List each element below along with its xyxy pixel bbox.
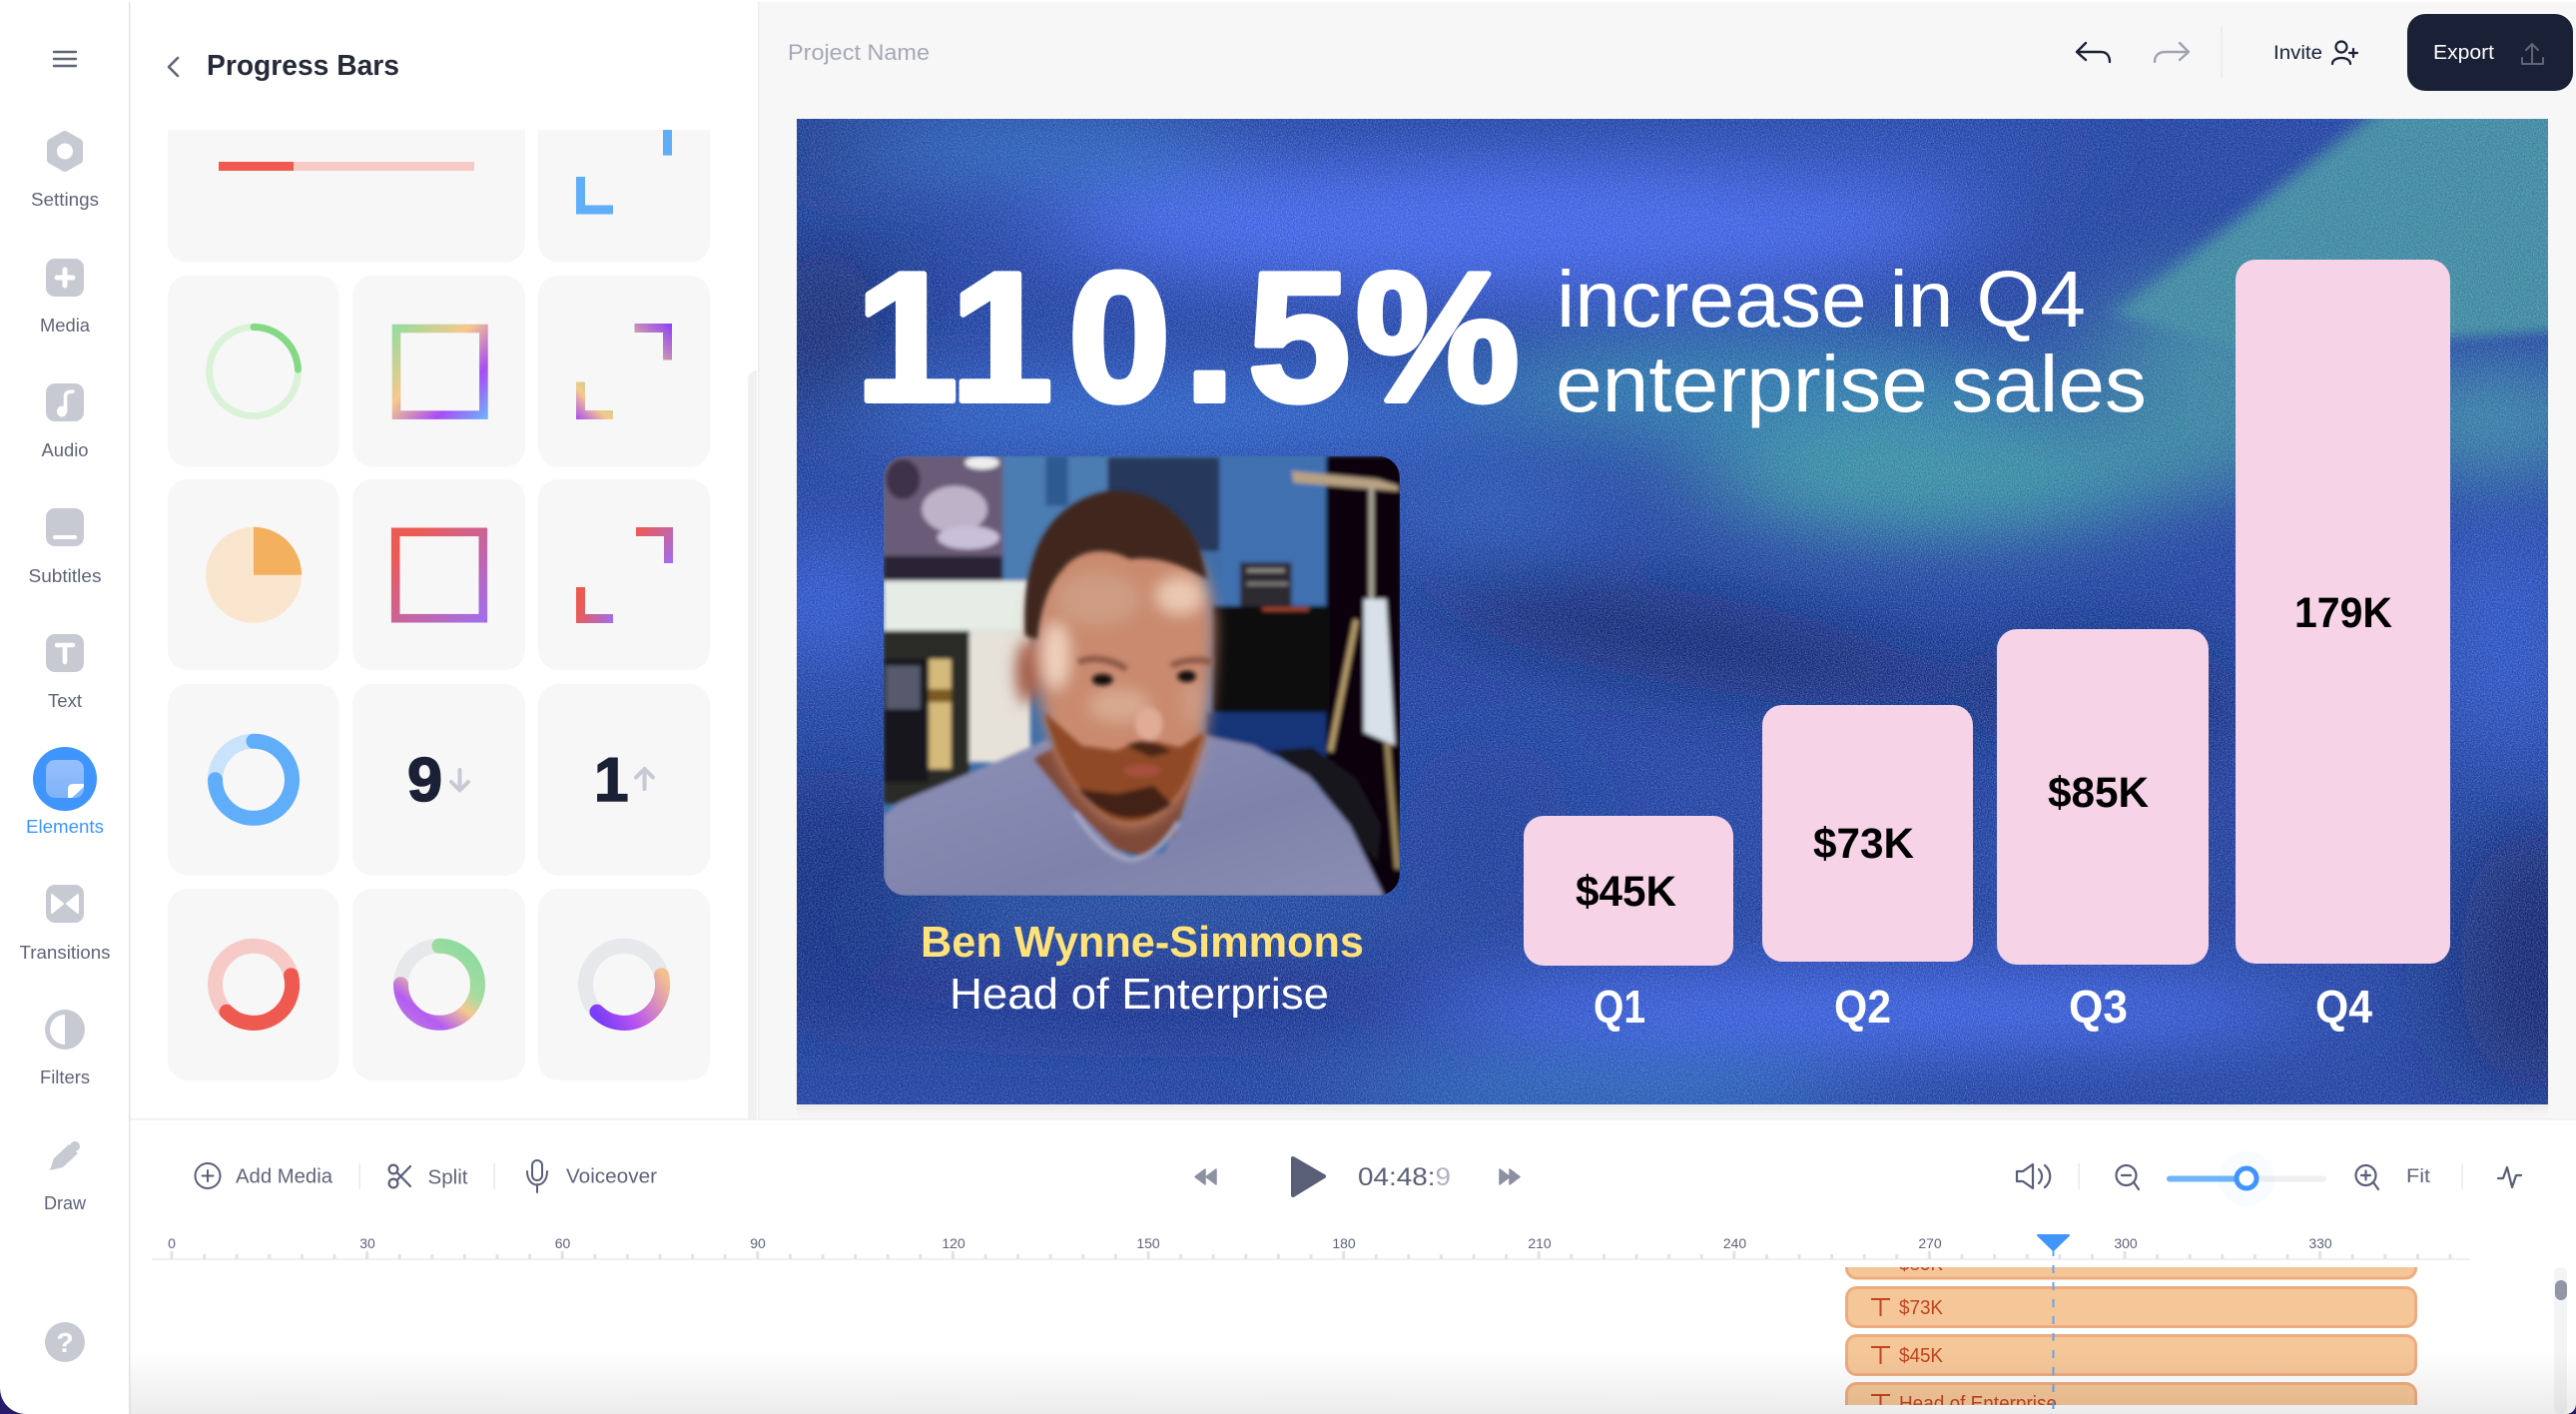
nav item: text: Text bbox=[48, 691, 82, 711]
bar Q3 bbox=[1997, 629, 2209, 1033]
timeline scrollbar bbox=[2554, 1267, 2567, 1414]
zoom slider bbox=[2167, 1150, 2326, 1206]
toolbar: add media bbox=[196, 1163, 333, 1188]
icon: activity bbox=[2498, 1167, 2521, 1187]
card: counter 9: 9 bbox=[407, 746, 442, 815]
bar Q1: $45K bbox=[1576, 868, 1676, 916]
nav item: settings: Settings bbox=[31, 190, 99, 210]
headline line 2: enterprise sales bbox=[1556, 340, 2147, 428]
track: head of enterprise bbox=[1847, 1384, 2416, 1414]
nav item: media: Media bbox=[40, 316, 91, 336]
card: blue donut bbox=[168, 684, 339, 876]
nav item: elements active: Elements bbox=[26, 817, 104, 837]
bar Q2: $73K bbox=[1813, 820, 1914, 868]
bar Q1 bbox=[1524, 816, 1733, 1033]
nav item: draw: Draw bbox=[44, 1193, 87, 1213]
icon: redo bbox=[2155, 43, 2189, 62]
presenter role: Head of Enterprise bbox=[950, 970, 1329, 1019]
icon: invite person bbox=[2332, 42, 2357, 64]
icon: zoom out bbox=[2117, 1165, 2139, 1189]
window bottom fade bbox=[130, 1350, 2576, 1414]
window corners bbox=[0, 1388, 2576, 1414]
presenter name: Ben Wynne-Simmons bbox=[921, 918, 1364, 967]
fit label: Fit bbox=[2406, 1166, 2431, 1187]
icon: upload bbox=[2522, 44, 2543, 64]
sidebar bbox=[0, 0, 130, 1414]
nav item: subtitles bbox=[28, 508, 102, 586]
ruler: 60 bbox=[555, 1235, 570, 1251]
nav item: text bbox=[46, 634, 84, 711]
bar Q3: Q3 bbox=[2069, 981, 2128, 1033]
card: counter 1: 1 bbox=[594, 746, 628, 815]
card: violet donut bbox=[538, 889, 710, 1080]
top bar bbox=[788, 14, 2573, 91]
ruler bbox=[152, 1235, 2470, 1260]
help button: ? bbox=[56, 1327, 74, 1358]
button: fast forward bbox=[1500, 1169, 1520, 1184]
card: red purple square bbox=[352, 479, 525, 670]
ruler: 240 bbox=[1723, 1235, 1746, 1251]
card grid bbox=[168, 60, 710, 1080]
timeline tracks bbox=[1847, 1238, 2416, 1414]
playhead bbox=[2038, 1235, 2069, 1414]
nav item: filters: Filters bbox=[40, 1067, 90, 1087]
bar Q1: Q1 bbox=[1594, 981, 1645, 1033]
bar Q2 bbox=[1762, 705, 1973, 1033]
track: $73K bbox=[1847, 1288, 2416, 1326]
icon: volume bbox=[2017, 1164, 2050, 1188]
bar chart bbox=[1524, 260, 2450, 1033]
panel scrollbar bbox=[748, 370, 757, 1118]
ruler: 0 bbox=[168, 1235, 176, 1251]
track: $73K: $73K bbox=[1899, 1297, 1944, 1319]
bar Q3: $85K bbox=[2048, 769, 2149, 817]
nav item: elements active bbox=[26, 747, 104, 837]
card: gradient donut bbox=[352, 889, 525, 1080]
track: $85K: $85K bbox=[1899, 1253, 1944, 1275]
head bbox=[1015, 522, 1214, 826]
icon: undo bbox=[2077, 43, 2110, 62]
ruler: 330 bbox=[2308, 1235, 2332, 1251]
ruler: 210 bbox=[1528, 1235, 1552, 1251]
headline line 1: increase in Q4 bbox=[1557, 255, 2086, 344]
photo of presenter bbox=[884, 456, 1402, 899]
toolbar: voiceover: Voiceover bbox=[566, 1166, 657, 1188]
ruler: 150 bbox=[1136, 1235, 1160, 1251]
bar Q4: 179K bbox=[2294, 589, 2392, 637]
toolbar: add media: Add Media bbox=[236, 1166, 333, 1188]
timeline panel bbox=[130, 1118, 2576, 1414]
nav item: subtitles: Subtitles bbox=[28, 566, 102, 586]
nav item: transitions bbox=[20, 885, 110, 963]
button: rewind bbox=[1195, 1169, 1216, 1184]
export button bbox=[2407, 14, 2573, 91]
help button bbox=[45, 1322, 85, 1362]
icon: menu bbox=[54, 52, 76, 66]
button: play bbox=[1293, 1158, 1324, 1195]
big stat 110.5%: 110.5% bbox=[856, 234, 1520, 439]
main canvas background bbox=[759, 2, 2576, 1118]
ruler: 270 bbox=[1918, 1235, 1942, 1251]
slide background gradient bbox=[797, 119, 2548, 1104]
track: $45K bbox=[1847, 1336, 2416, 1374]
nav item: media bbox=[40, 259, 91, 336]
nav item: audio bbox=[42, 383, 88, 460]
ruler: 90 bbox=[750, 1235, 766, 1251]
project name: Project Name bbox=[788, 40, 930, 65]
toolbar: voiceover bbox=[527, 1160, 657, 1192]
nav item: draw bbox=[44, 1141, 87, 1213]
bar Q4: Q4 bbox=[2315, 981, 2372, 1033]
timecode: 04:48: 9 bbox=[1358, 1163, 1451, 1191]
card: counter 9 bbox=[352, 684, 525, 876]
export button: Export bbox=[2433, 42, 2494, 64]
ruler: 120 bbox=[942, 1235, 966, 1251]
nav item: transitions: Transitions bbox=[20, 943, 110, 963]
bar Q4 bbox=[2236, 260, 2450, 1033]
icon: zoom in bbox=[2356, 1165, 2378, 1189]
icon: back chevron bbox=[169, 58, 178, 76]
ruler: 180 bbox=[1332, 1235, 1356, 1251]
slide shadow bbox=[797, 1104, 2548, 1118]
card: linear bar bbox=[168, 60, 525, 263]
card: gradient square bbox=[352, 276, 525, 466]
card: red purple corners bbox=[538, 479, 710, 670]
card: counter 1 bbox=[538, 684, 710, 876]
slide bbox=[797, 119, 2548, 1104]
panel heading: Progress Bars bbox=[207, 50, 399, 82]
toolbar: split: Split bbox=[427, 1166, 468, 1188]
ruler: 300 bbox=[2114, 1235, 2138, 1251]
card: red donut bbox=[168, 889, 339, 1080]
card: blue corners bbox=[538, 60, 710, 263]
nav item: audio: Audio bbox=[42, 440, 88, 460]
panel: progress bars bbox=[130, 0, 759, 1118]
track: $85K bbox=[1847, 1238, 2416, 1278]
nav item: settings bbox=[31, 135, 99, 210]
card: pie bbox=[168, 479, 339, 670]
invite label: Invite bbox=[2273, 43, 2322, 64]
bar Q2: Q2 bbox=[1834, 981, 1891, 1033]
card: gradient corners bbox=[538, 276, 710, 466]
nav item: filters bbox=[40, 1010, 90, 1087]
neck and collar bbox=[1033, 716, 1206, 860]
toolbar: split bbox=[389, 1165, 468, 1188]
card: green ring bbox=[168, 276, 339, 466]
ruler: 30 bbox=[359, 1235, 375, 1251]
track: $45K: $45K bbox=[1899, 1345, 1944, 1367]
